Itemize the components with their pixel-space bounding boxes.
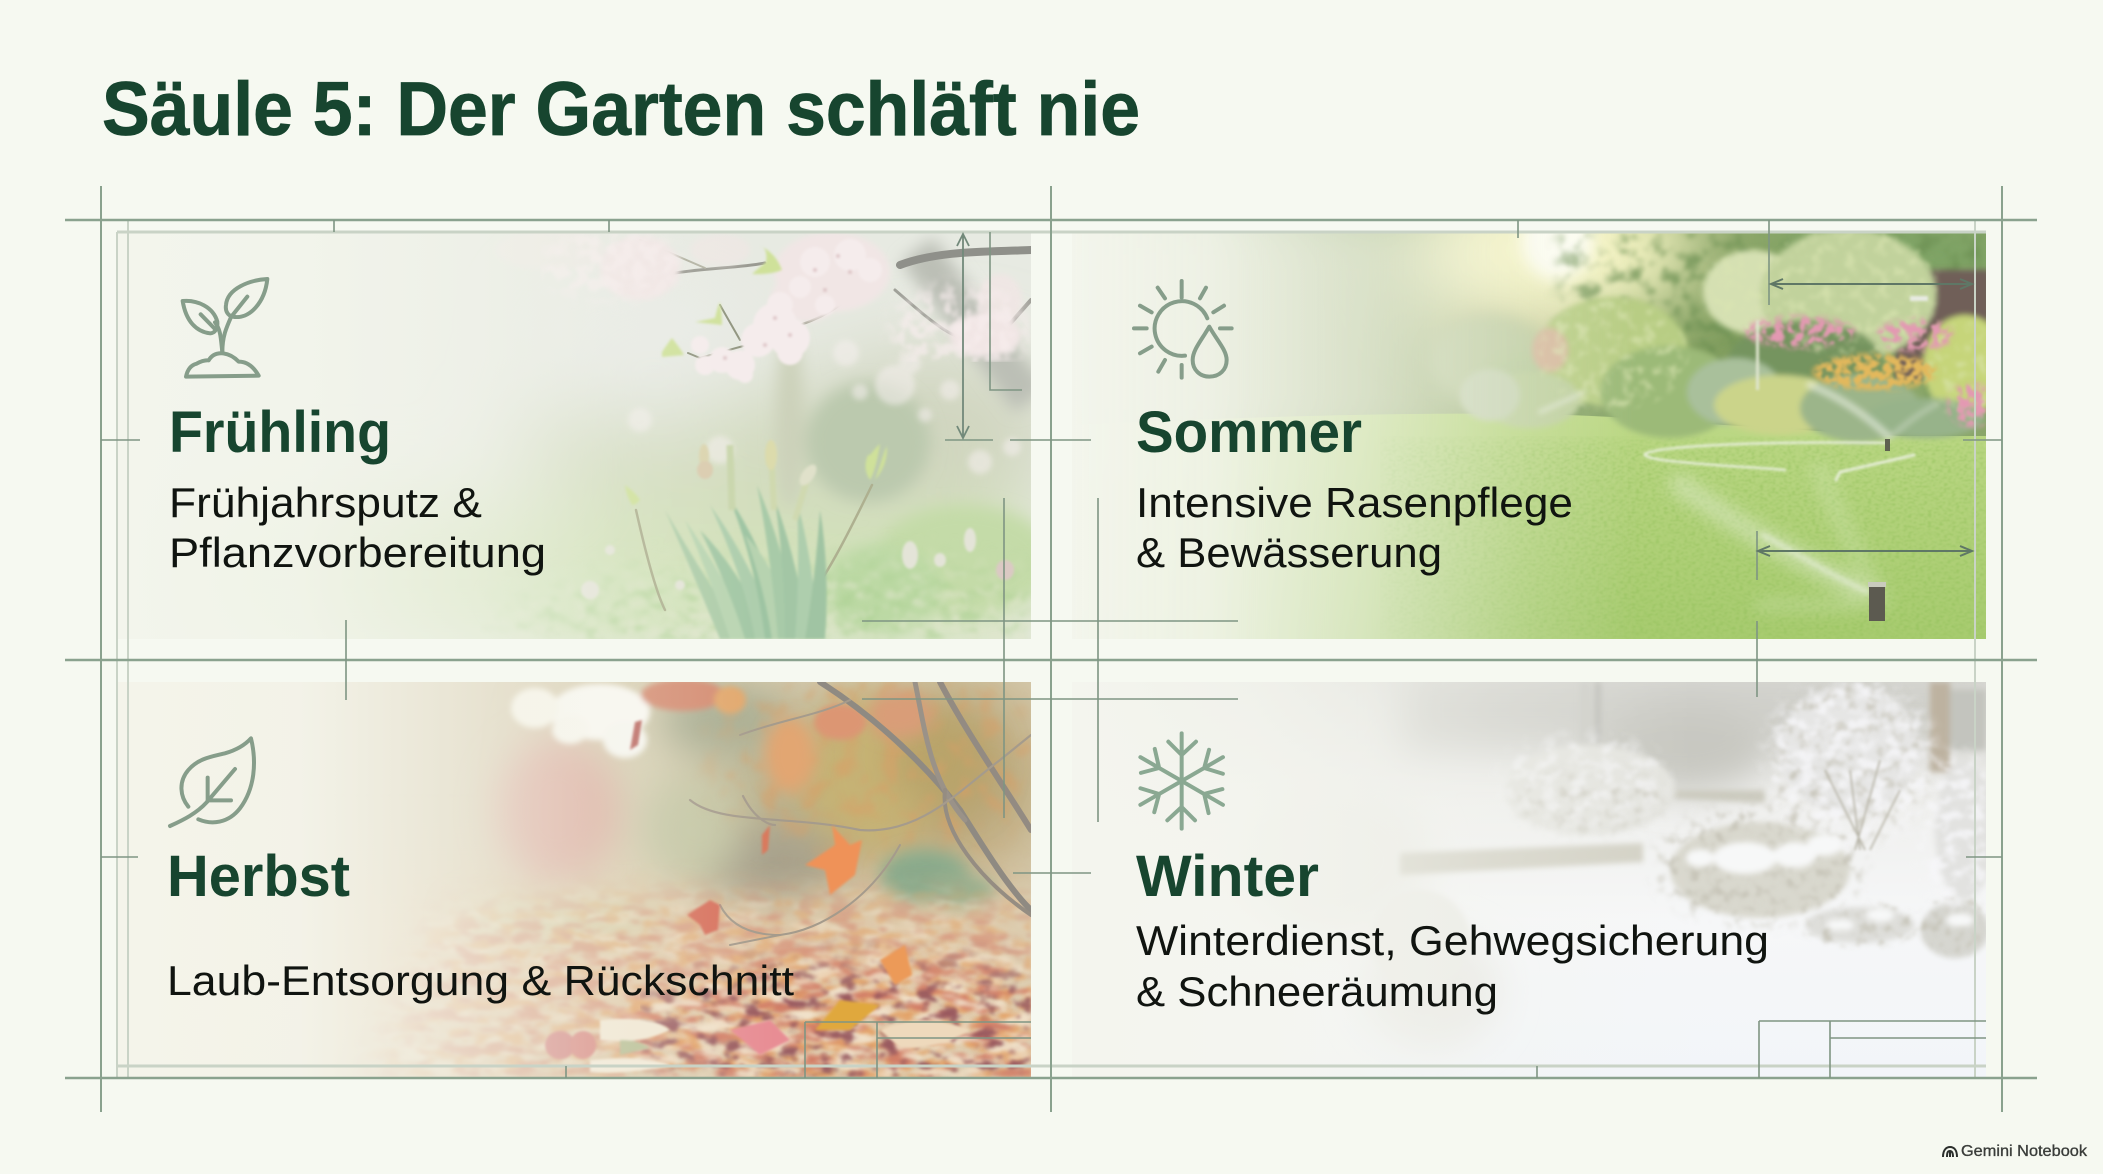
footer logo [1943,1143,2088,1160]
heading: Herbst: Herbst [167,844,350,909]
text: Winter tasks: Winterdienst, Gehwegsicherung [1136,917,1769,964]
footer label: Gemini Notebook [1961,1143,2088,1160]
dimension arrow: summer top [1771,279,1972,289]
text: Sommer tasks: Intensive Rasenpflege [1136,479,1573,526]
icon: sun and water drop [1134,281,1232,378]
icon: notebook mark [1943,1147,1957,1157]
icon: snowflake [1133,733,1230,829]
photo: spring garden [231,234,1031,639]
blueprint grid lines [65,186,2037,1112]
text: Winter tasks [1136,917,1769,1015]
text: Sommer tasks: & Bewässerung [1136,529,1442,576]
heading: Sommer: Sommer [1136,400,1362,465]
text: Sommer tasks [1136,479,1573,576]
icon: sprout [183,279,267,377]
heading: Frühling: Frühling [169,400,391,465]
panel: Frühling [172,234,1031,639]
photo: snowy garden [1257,682,1986,1046]
dimension arrow: summer bottom [1758,546,1972,556]
title: Säule 5: Der Garten schläft nie [102,67,1140,152]
panel: Sommer [1072,165,2020,639]
text: Frühling tasks: Pflanzvorbereitung [169,529,546,576]
dimension arrow: vertical [957,234,969,438]
text: Winter tasks: & Schneeräumung [1136,968,1498,1015]
text: Herbst tasks: Laub-Entsorgung & Rückschnitt [167,957,794,1004]
panel: Herbst [117,679,1050,1080]
text: Frühling tasks: Frühjahrsputz & [169,479,482,526]
icon: leaf [170,738,254,826]
text: Frühling tasks [169,479,546,576]
panel: Winter [1136,682,1986,1046]
heading: Winter: Winter [1136,844,1319,909]
photo: summer lawn with sprinklers [1072,165,2020,639]
photo: autumn leaves [195,682,1031,1077]
